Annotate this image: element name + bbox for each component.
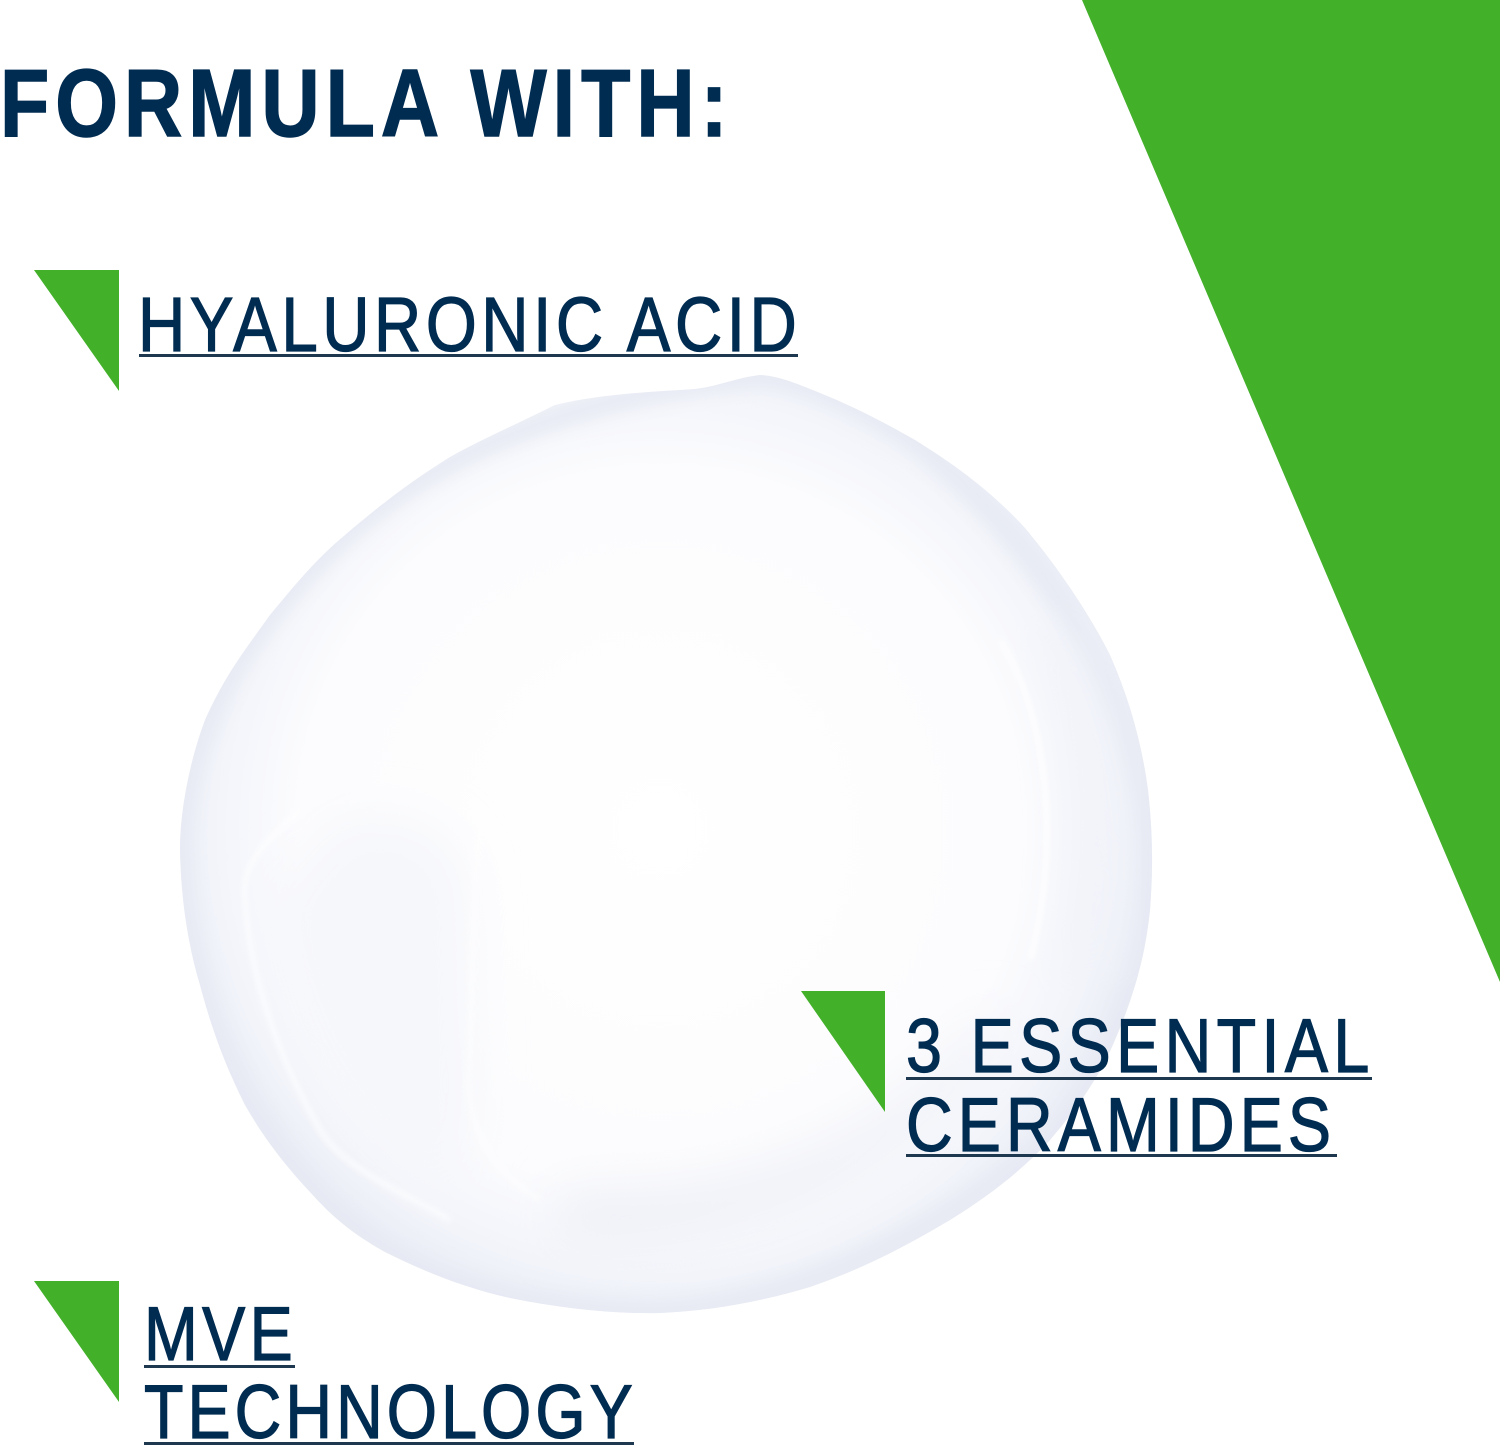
label: ceramides: CERAMIDES	[906, 1082, 1331, 1167]
underline: ceramides	[906, 1154, 1337, 1157]
underline: technology	[144, 1442, 634, 1445]
label: hyaluronic acid: HYALURONIC ACID	[138, 282, 797, 368]
cream right shadow band	[1040, 620, 1118, 980]
title: FORMULA WITH:	[0, 49, 727, 157]
cream lower right shadow	[598, 1167, 805, 1216]
underline: 3 essential	[906, 1077, 1372, 1080]
cream edge tint	[228, 381, 1036, 682]
underline: hyaluronic acid	[139, 354, 798, 357]
cream swatch	[170, 365, 1160, 1325]
icon: green triangle	[801, 991, 885, 1112]
bullet: 3 essential ceramides	[801, 991, 1372, 1167]
cream highlights	[244, 640, 1047, 1220]
icon: green triangle	[34, 270, 119, 391]
bullet: hyaluronic acid	[34, 270, 798, 391]
green corner shape	[1082, 0, 1500, 982]
bullet: mve technology	[34, 1281, 634, 1447]
icon: green triangle	[34, 1281, 119, 1402]
underline: mve	[144, 1365, 295, 1368]
label: mve: MVE	[144, 1291, 293, 1376]
cream left fold shadow	[270, 817, 475, 1200]
label: 3 essential: 3 ESSENTIAL	[906, 1003, 1369, 1088]
